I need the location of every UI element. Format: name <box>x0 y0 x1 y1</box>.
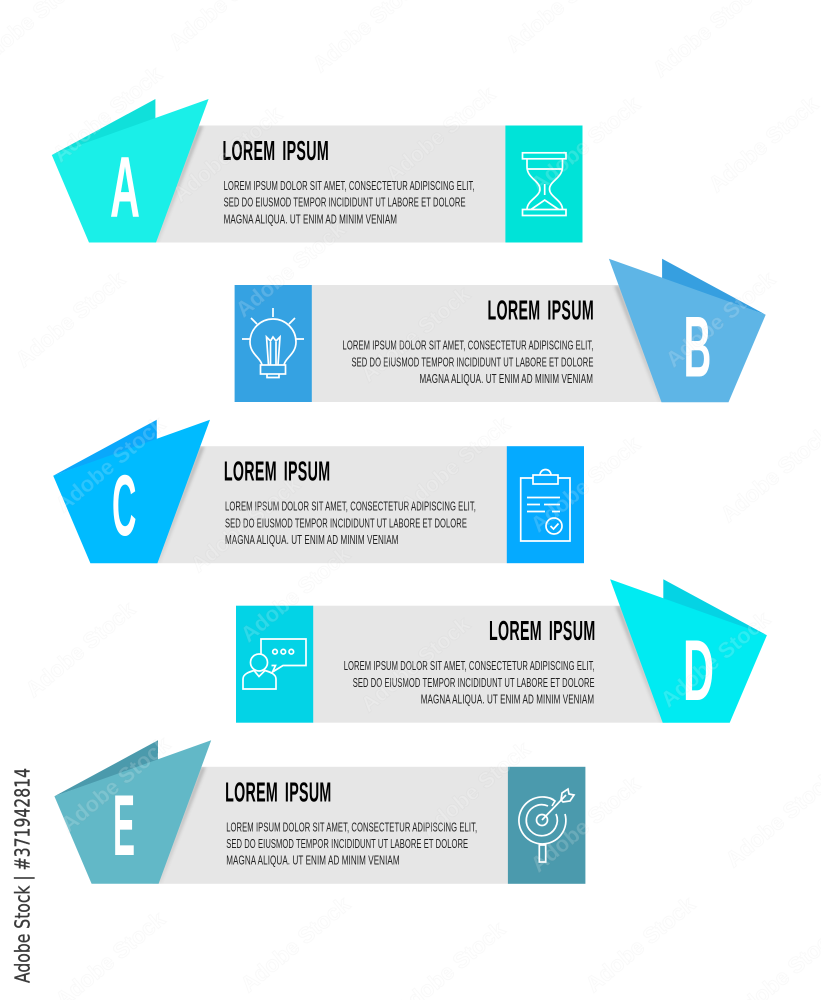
watermark: repeated stock text: Adobe Stock <box>236 541 355 647</box>
watermark: repeated stock text: Adobe Stock <box>236 891 355 997</box>
front flap C <box>53 420 210 563</box>
icon: clipboard <box>521 470 570 541</box>
body text A: LOREM IPSUM DOLOR SIT AMET, CONSECTETUR ADIPISCING ELIT, <box>224 178 475 193</box>
panel: row C: C <box>112 458 136 554</box>
watermark: repeated stock text: Adobe Stock <box>396 411 515 517</box>
watermark: repeated stock text: Adobe Stock <box>231 216 350 322</box>
flap shadow E <box>159 767 206 884</box>
heading D: LOREM IPSUM <box>489 615 596 646</box>
panel: row C <box>53 420 584 563</box>
body text A: MAGNA ALIQUA. UT ENIM AD MINIM VENIAM <box>224 211 397 226</box>
front flap E <box>54 740 211 884</box>
watermark: repeated stock text: Adobe Stock <box>356 281 475 387</box>
watermark: repeated stock text: Adobe Stock <box>186 471 305 577</box>
stock credit label: Adobe Stock | #371942814 <box>10 768 34 983</box>
heading C: LOREM IPSUM <box>224 456 330 487</box>
grey bar D <box>312 606 668 723</box>
back flap C <box>53 420 157 476</box>
panel: row D <box>236 579 767 723</box>
watermark: repeated stock text: Adobe Stock <box>381 81 500 187</box>
back flap B <box>662 259 766 315</box>
body text D: LOREM IPSUM DOLOR SIT AMET, CONSECTETUR ADIPISCING ELIT, <box>344 658 595 673</box>
front flap A <box>52 99 209 242</box>
heading B: LOREM IPSUM <box>488 295 594 326</box>
flap shadow D <box>616 606 663 723</box>
watermark: repeated stock text: Adobe Stock <box>526 91 645 197</box>
heading A: LOREM IPSUM <box>222 135 329 166</box>
body text C: MAGNA ALIQUA. UT ENIM AD MINIM VENIAM <box>225 532 398 547</box>
icon: hourglass <box>522 153 566 216</box>
watermark: repeated stock text: Adobe Stock <box>21 596 140 702</box>
body text E: SED DO EIUSMOD TEMPOR INCIDIDUNT UT LABORE ET DOLORE <box>226 836 468 851</box>
back flap D <box>663 579 767 635</box>
body text C: SED DO EIUSMOD TEMPOR INCIDIDUNT UT LABORE ET DOLORE <box>225 515 467 530</box>
watermark: repeated stock text: Adobe Stock <box>56 731 175 837</box>
panel: row B <box>235 259 766 402</box>
watermark: repeated stock text: Adobe Stock <box>11 266 130 372</box>
panel: row A: A <box>110 140 140 236</box>
front flap D <box>610 579 767 723</box>
flap shadow C <box>157 446 204 563</box>
icon: light bulb <box>242 308 304 378</box>
icon box B <box>235 285 312 402</box>
body text D: SED DO EIUSMOD TEMPOR INCIDIDUNT UT LABORE ET DOLORE <box>353 675 595 690</box>
icon: target with arrow <box>519 789 574 862</box>
body text D: MAGNA ALIQUA. UT ENIM AD MINIM VENIAM <box>421 692 594 706</box>
watermark: repeated stock text: Adobe Stock <box>48 61 167 167</box>
watermark: repeated stock text: Adobe Stock <box>656 606 775 712</box>
front flap B <box>609 259 766 402</box>
body text C: LOREM IPSUM DOLOR SIT AMET, CONSECTETUR ADIPISCING ELIT, <box>225 499 476 514</box>
body text B: LOREM IPSUM DOLOR SIT AMET, CONSECTETUR ADIPISCING ELIT, <box>342 338 594 353</box>
heading E: LOREM IPSUM <box>225 776 332 807</box>
grey bar C <box>151 446 507 563</box>
icon box C <box>507 446 584 563</box>
body text C <box>225 499 476 547</box>
body text D <box>344 658 595 706</box>
watermark: repeated stock text: Adobe Stock <box>661 266 780 372</box>
body text B <box>342 338 594 386</box>
body text A <box>224 178 475 226</box>
grey bar B <box>311 285 667 402</box>
panel: row E <box>54 740 585 884</box>
watermark: repeated stock text: Adobe Stock <box>51 411 170 517</box>
panel: row E: E <box>113 778 135 874</box>
body text B: MAGNA ALIQUA. UT ENIM AD MINIM VENIAM <box>420 371 593 386</box>
panel: row D: D <box>683 623 714 719</box>
icon box E <box>508 767 585 884</box>
body text E: MAGNA ALIQUA. UT ENIM AD MINIM VENIAM <box>226 853 400 868</box>
back flap A <box>52 99 155 155</box>
watermark: repeated stock text: Adobe Stock <box>416 736 535 842</box>
icon box D <box>236 606 313 723</box>
back flap E <box>54 740 158 796</box>
icon box A <box>505 126 582 242</box>
body text B: SED DO EIUSMOD TEMPOR INCIDIDUNT UT LABORE ET DOLORE <box>352 354 594 369</box>
flap shadow A <box>156 126 203 242</box>
grey bar E <box>153 767 509 884</box>
watermark: repeated stock text: Adobe Stock <box>526 431 645 537</box>
flap shadow B <box>614 285 662 402</box>
panel: row B: B <box>684 300 711 396</box>
body text E: LOREM IPSUM DOLOR SIT AMET, CONSECTETUR ADIPISCING ELIT, <box>226 819 477 834</box>
watermark: repeated stock text: Adobe Stock <box>526 771 645 877</box>
body text A: SED DO EIUSMOD TEMPOR INCIDIDUNT UT LABORE ET DOLORE <box>224 195 466 210</box>
watermark: repeated stock text: Adobe Stock <box>581 891 700 997</box>
grey bar A <box>150 126 506 242</box>
watermark: repeated stock text: Adobe Stock <box>704 91 821 197</box>
icon: person with speech bubble <box>243 639 306 689</box>
panel: row A <box>52 99 583 242</box>
watermark: repeated stock text: Adobe Stock <box>356 611 475 717</box>
body text E <box>226 819 477 868</box>
watermark: repeated stock text: Adobe Stock <box>168 101 287 207</box>
